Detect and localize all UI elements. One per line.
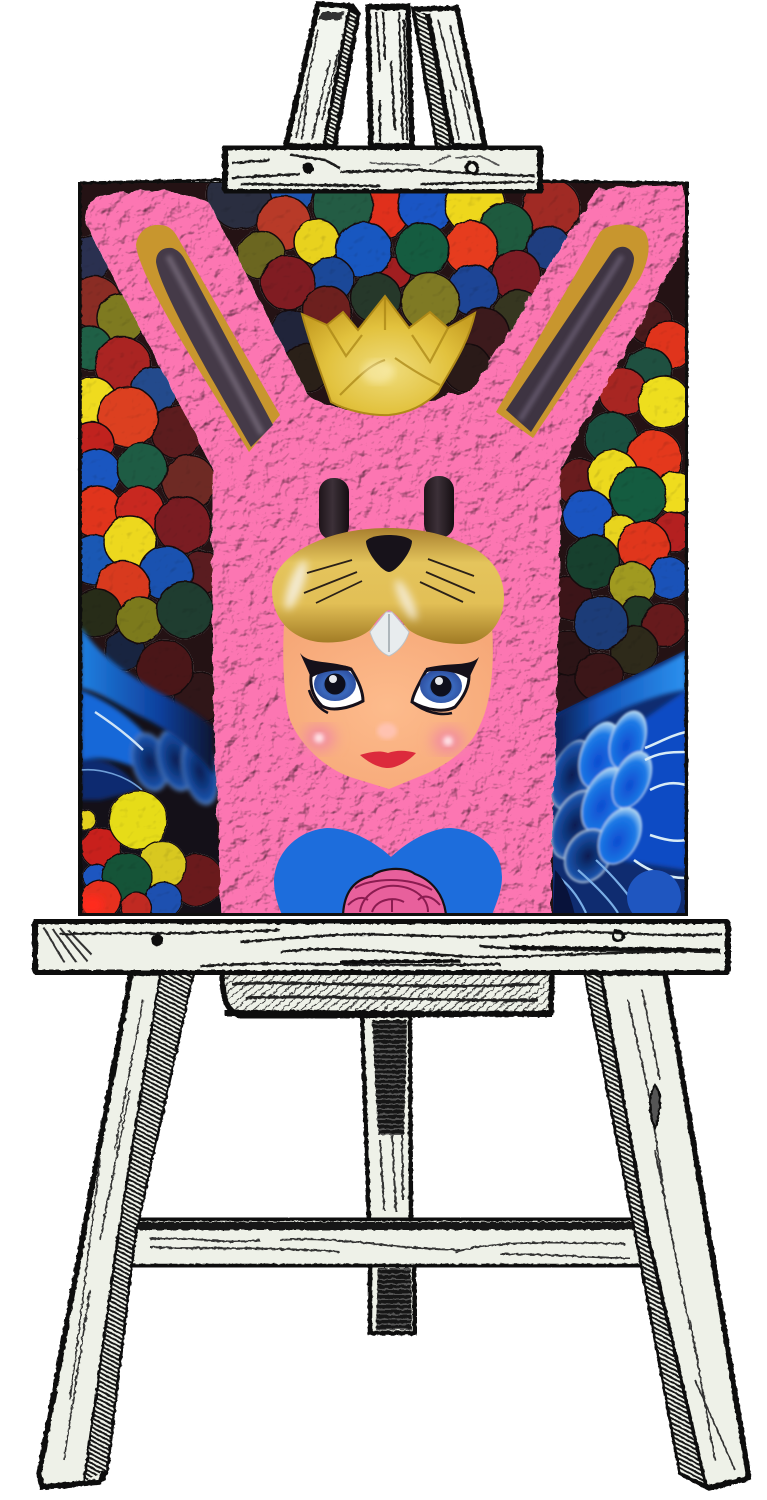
icon: gold crown (302, 296, 475, 415)
background: coloured paint dabs (67, 161, 696, 722)
easel lower cross bar (130, 1219, 645, 1266)
left eye (300, 653, 363, 713)
red bleed corner (80, 895, 104, 915)
easel under-shelf ledge (222, 972, 552, 1017)
easel left leg (39, 973, 192, 1487)
blue dot (627, 870, 681, 913)
bunny body (86, 185, 686, 925)
canvas sketched frame (80, 180, 687, 914)
mask highlights (281, 558, 421, 622)
teeth (370, 612, 409, 656)
upper post (362, 1015, 411, 1222)
beaver mask (272, 528, 504, 644)
mask ears (319, 476, 454, 540)
easel rear masts (286, 4, 485, 146)
blue heart (274, 828, 502, 920)
leg shaded side (586, 975, 706, 1484)
middle mast (368, 4, 412, 146)
easel rear centre post (362, 1015, 415, 1333)
easel right leg (586, 973, 749, 1488)
cheeks (303, 725, 464, 754)
right wing (550, 650, 685, 913)
whiskers (304, 559, 475, 603)
right eye (412, 657, 479, 714)
easel main shelf (35, 921, 728, 973)
icon: right inner ear (496, 224, 649, 438)
face (272, 528, 504, 789)
left lower dots (82, 790, 221, 913)
right mast (414, 8, 485, 146)
pink ears and body (86, 185, 686, 925)
wood knot (650, 1085, 660, 1128)
icon: pink rose (343, 869, 446, 915)
icon: left inner ear (136, 225, 280, 452)
painting canvas (67, 161, 696, 925)
left mast (286, 4, 358, 146)
lips (360, 751, 416, 768)
easel top clamp (225, 147, 540, 192)
left wing (81, 627, 225, 913)
skin (283, 625, 493, 789)
lower post (370, 1262, 415, 1333)
nose highlight (377, 723, 397, 739)
leg shaded side (84, 975, 192, 1482)
nose (366, 535, 412, 572)
